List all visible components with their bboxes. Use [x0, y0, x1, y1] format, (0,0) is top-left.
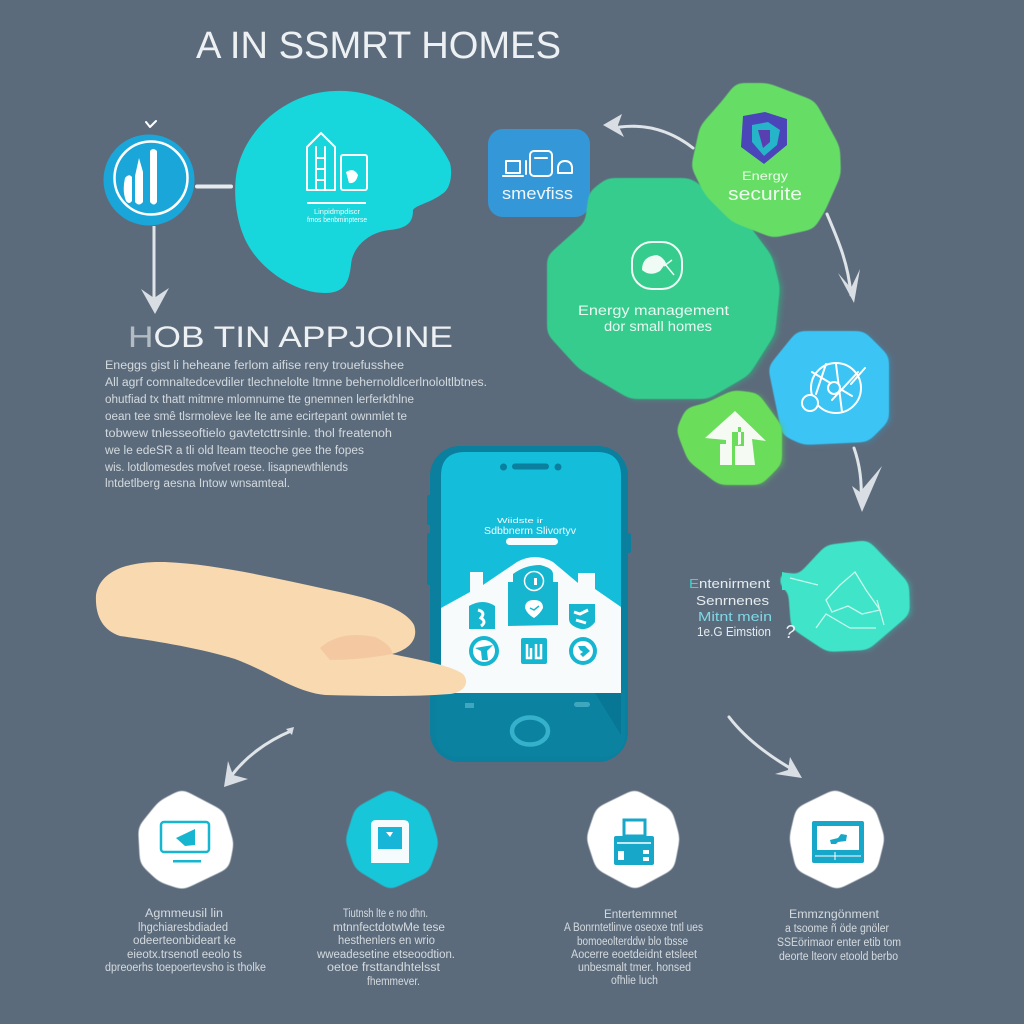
blob caption: Linpidmpdiscr	[314, 209, 361, 216]
text block: intro: tobwew tnlesseoftielo gavtetcttrsinle. thol freatenoh	[105, 428, 392, 440]
arrow: badge to services	[603, 114, 693, 148]
blob caption	[307, 209, 367, 224]
text block: intro: we le edeSR a tli old lteam tteoche gee the fopes	[104, 445, 364, 457]
node spout	[782, 572, 802, 590]
hand shading	[320, 635, 392, 660]
icon: house	[705, 411, 766, 465]
phone softkeys	[465, 702, 590, 708]
app icon: three	[469, 636, 499, 666]
badge label: securite	[728, 184, 802, 204]
card text: wweadesetine etseoodtion.	[316, 949, 455, 961]
phone screen	[441, 452, 621, 693]
panel: teal blob	[235, 91, 451, 293]
card text: fhemmever.	[367, 976, 420, 988]
arrow: network to entertainment	[852, 448, 882, 512]
connector: circle to blob	[197, 184, 231, 188]
center door panel	[508, 565, 558, 626]
blob divider	[307, 202, 366, 204]
heading: how it works: HOB TIN APPJOINE	[128, 321, 453, 354]
text: entertainment list: 1e.G Eimstion	[697, 624, 771, 639]
screen caption: Wiidste ir	[497, 518, 544, 525]
hub label	[578, 303, 729, 334]
card text: dpreoerhs toepoertevsho is tholke	[105, 962, 266, 974]
card text: Emmzngönment	[789, 909, 880, 921]
card text: mtnnfectdotwMe tese	[333, 922, 445, 934]
app icon: five	[569, 637, 597, 665]
speaker	[500, 464, 562, 470]
panel: energy security badge	[691, 83, 841, 238]
icon: map outline	[790, 572, 884, 628]
panel: blue network node	[768, 331, 890, 445]
card text: A Bonrntetlinve oseoxe tntl ues	[564, 922, 703, 934]
card text: Entertemmnet	[604, 909, 678, 921]
text: entertainment list: Mitnt mein	[698, 609, 772, 624]
text block: intro: All agrf comnaltedcevdiler tlechnelolte ltmne behernoldlcerlnololtlbtnes.	[105, 377, 487, 389]
icon: monitor	[161, 822, 209, 862]
text: entertainment list: Senrnenes	[696, 593, 770, 608]
app icon: four	[521, 638, 547, 664]
card text: Agmmeusil lin	[145, 908, 223, 920]
icon: devices	[503, 151, 572, 176]
phone	[427, 446, 631, 762]
icon: leaf ring	[632, 242, 682, 289]
card text: unbesmalt tmer. honsed	[578, 962, 691, 974]
icon: shield	[741, 112, 787, 164]
panel: card two	[316, 789, 455, 988]
text: entertainment list: Entenirment	[689, 576, 770, 591]
home button	[512, 718, 548, 744]
arrow: down to heading	[141, 226, 169, 314]
card text: hesthenlers en wrio	[338, 935, 435, 947]
text block: intro: wis. lotdlomesdes mofvet roese. lisapnewthlends	[104, 462, 348, 474]
panel: card one	[105, 789, 266, 974]
hub label: Energy management	[578, 303, 729, 318]
text block: intro	[104, 360, 487, 490]
hexagon badge	[345, 789, 439, 890]
icon: laptop screen	[812, 821, 864, 863]
card text: oetoe frsttandhtelsst	[327, 962, 441, 974]
text block: intro: oean tee smê tlsrmoleve lee lte ame ecirtepant ownmlet te	[105, 411, 407, 423]
hand	[96, 562, 466, 696]
arrow: phone to entertainment	[729, 717, 802, 778]
arrow: phone to apps	[224, 727, 294, 787]
card text	[316, 908, 455, 988]
panel: energy management hub	[547, 178, 782, 399]
hub label: dor small homes	[604, 319, 712, 334]
panel: entertainment node	[780, 540, 911, 652]
icon: printer kit	[614, 820, 654, 865]
panel: card three	[564, 789, 703, 987]
title: A IN SSMRT HOMES	[196, 25, 561, 67]
badge label: Energy	[742, 169, 788, 183]
card text: a tsoome ñ öde gnöler	[785, 923, 889, 935]
icon: tower and device	[307, 133, 367, 190]
panel: card four	[777, 789, 901, 963]
blob caption: fmos benbminpterse	[307, 217, 367, 224]
card text	[105, 908, 266, 974]
screen pill	[506, 538, 558, 545]
arrow: badge to network	[827, 214, 860, 303]
card text: Aocerre eoetdeidnt etsleet	[571, 949, 698, 961]
hexagon badge	[789, 789, 885, 890]
icon: device	[371, 820, 409, 863]
panel: blue services card	[488, 129, 590, 217]
card text	[564, 909, 703, 987]
card text: eieotx.trsenotl eeolo ts	[127, 949, 242, 961]
app icon: one	[469, 602, 495, 629]
hexagon badge	[138, 789, 234, 890]
house shape	[441, 557, 621, 693]
panel: green home node	[676, 390, 783, 485]
icon: blue chart circle	[104, 121, 194, 226]
card text: deorte lteorv etoold berbo	[779, 951, 898, 963]
text block: intro: ohutfiad tx thatt mitmre mlomnume tte gnemnen lerferkthlne	[105, 394, 414, 406]
text block: intro: Eneggs gist li heheane ferlom aifise reny trouefusshee	[105, 360, 404, 372]
card text	[777, 909, 901, 963]
card text: lhgchiaresbdiaded	[138, 922, 228, 934]
card text: ofhlie luch	[611, 975, 658, 987]
card text: SSEörimaor enter etib tom	[777, 937, 901, 949]
card text: odeerteonbideart ke	[133, 935, 236, 947]
card text: Tiutnsh lte e no dhn.	[343, 908, 428, 920]
card label: smevfiss	[502, 184, 573, 203]
card text: bomoeolterddw blo tbsse	[577, 936, 688, 948]
screen caption: Sdbbnerm Slivortyv	[484, 526, 576, 537]
screen caption	[484, 518, 576, 537]
text block: intro: lntdetlberg aesna Intow wnsamteal.	[105, 478, 290, 490]
hexagon badge	[586, 789, 680, 890]
badge label	[728, 169, 802, 204]
app icon: two	[569, 604, 595, 629]
text: entertainment list: ?	[785, 622, 795, 642]
icon: globe tool	[802, 363, 865, 413]
text: entertainment list	[689, 576, 795, 642]
